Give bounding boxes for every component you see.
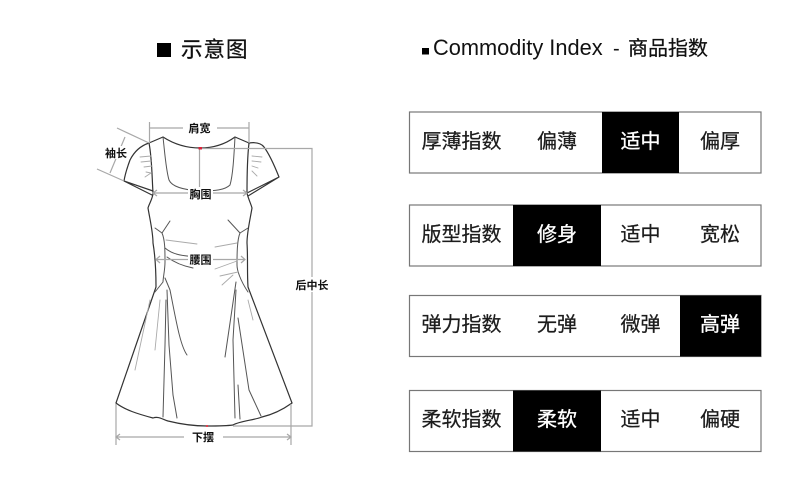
index row: thickness: 偏厚 xyxy=(700,130,740,153)
heading: diagram: 示意图 xyxy=(181,38,249,62)
dimension: chest: 胸围 xyxy=(190,187,212,201)
index row: elasticity: 无弹 xyxy=(537,313,577,336)
index row: elasticity: 弹力指数 xyxy=(422,313,502,336)
index row: fit: 宽松 xyxy=(700,223,740,246)
dress folds xyxy=(135,156,262,419)
index row: softness xyxy=(410,390,761,452)
index row: thickness: 偏薄 xyxy=(537,130,577,153)
heading: commodity index xyxy=(422,35,708,60)
index row: softness: 适中 xyxy=(620,408,660,431)
index row: thickness xyxy=(410,112,761,173)
dimension: shoulder width: 肩宽 xyxy=(188,121,210,135)
index row: thickness: 适中 xyxy=(620,130,660,153)
dimension: waist: 腰围 xyxy=(190,254,212,266)
index row: softness: 偏硬 xyxy=(700,408,740,431)
dimension: waist xyxy=(156,253,245,266)
dimension: back length: 后中长 xyxy=(296,278,328,292)
dimension: chest xyxy=(153,148,247,201)
heading: commodity index: - xyxy=(613,38,620,60)
index row: elasticity: 高弹 xyxy=(700,313,740,336)
index row: fit xyxy=(410,205,761,266)
dimension: shoulder width xyxy=(150,121,249,143)
dimension: back length xyxy=(198,147,329,427)
index row: fit: 修身 xyxy=(537,223,577,246)
dimension: hem: 下摆 xyxy=(192,430,214,444)
dress diagram xyxy=(97,121,329,445)
index row: elasticity: 微弹 xyxy=(620,313,660,336)
dimension: sleeve length xyxy=(97,128,149,181)
dimension: sleeve length: 袖长 xyxy=(105,146,127,160)
index row: elasticity xyxy=(410,296,761,356)
dimension: hem xyxy=(116,404,291,445)
index row: fit: 适中 xyxy=(620,223,660,246)
index row: fit: 版型指数 xyxy=(422,223,502,246)
heading: commodity index: Commodity Index xyxy=(433,35,603,60)
dress outline xyxy=(116,137,292,426)
index row: softness: 柔软指数 xyxy=(422,408,502,431)
index row: thickness: 厚薄指数 xyxy=(422,130,502,153)
heading: commodity index: 商品指数 xyxy=(628,37,708,60)
index row: softness: 柔软 xyxy=(537,408,577,431)
